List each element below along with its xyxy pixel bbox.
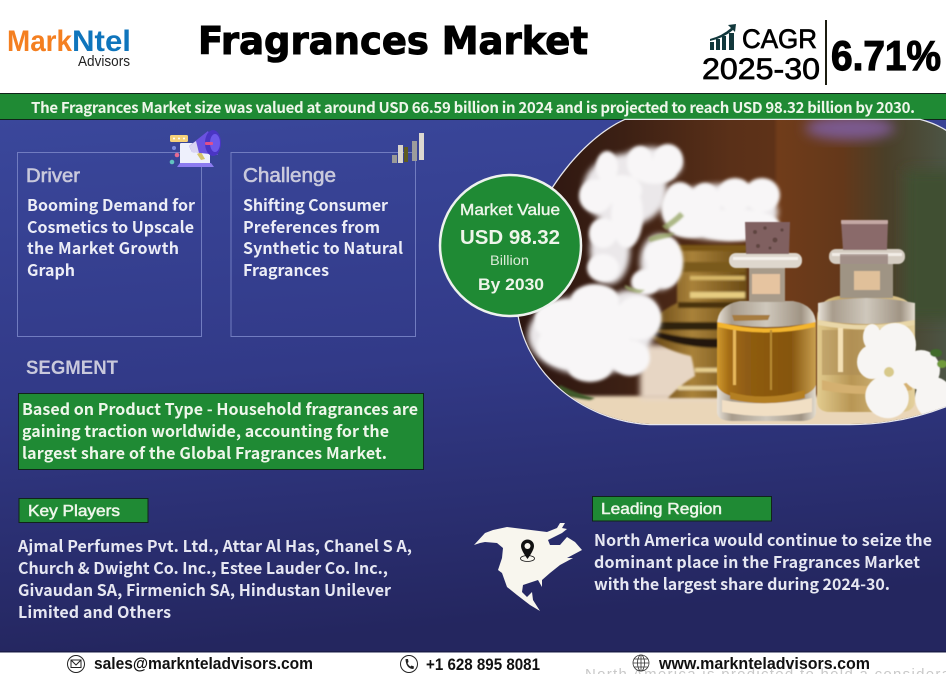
footer bar <box>0 651 946 674</box>
segment callout: largest share of the Global Fragrances Market. <box>22 440 387 464</box>
brass vase <box>647 245 747 398</box>
key players text: Givaudan SA, Firmenich SA, Hindustan Unilever <box>18 577 391 601</box>
leading region text: North America would continue to seize the <box>594 527 932 551</box>
panel: driver: Driver <box>26 166 81 187</box>
panel: challenge <box>231 152 416 336</box>
phone contact: +1 628 895 8081 <box>426 655 540 674</box>
segment callout <box>18 394 424 470</box>
main blue panel <box>0 119 946 652</box>
driver text: Graph <box>27 257 75 281</box>
icon: rising bars <box>392 133 424 163</box>
rear perfume bottle <box>817 220 915 412</box>
panel: challenge: Challenge <box>243 165 336 187</box>
photo: perfume bottles and white flowers <box>515 116 946 430</box>
market value badge <box>440 175 581 316</box>
key players text: Ajmal Perfumes Pvt. Ltd., Attar Al Has, Chanel S A, <box>17 533 412 557</box>
front perfume bottle <box>717 222 816 421</box>
segment callout: Based on Product Type - Household fragrances are <box>22 396 418 420</box>
challenge text <box>243 192 403 281</box>
map pin <box>520 540 534 562</box>
header logo: MarkNtel Advisors <box>7 25 131 70</box>
email contact: sales@marknteladvisors.com <box>94 654 313 673</box>
CAGR block: 2025-30 <box>702 53 820 86</box>
title: Fragrances Market <box>198 19 588 63</box>
leading region text <box>594 527 932 595</box>
CAGR block: CAGR <box>742 24 817 54</box>
challenge text: Synthetic to Natural <box>243 235 403 259</box>
key players label <box>19 498 148 522</box>
segment heading: SEGMENT <box>26 358 118 379</box>
challenge text: Preferences from <box>243 214 380 238</box>
driver text: Cosmetics to Upscale <box>27 214 194 238</box>
CAGR block <box>702 20 941 86</box>
icon: North America map with pin <box>474 523 582 611</box>
challenge text: Fragrances <box>243 257 329 281</box>
driver text: Booming Demand for <box>27 192 195 216</box>
market value badge: Billion <box>490 253 529 268</box>
driver text <box>27 192 195 281</box>
key players text: Limited and Others <box>18 599 171 623</box>
icon: growth chart <box>710 24 736 50</box>
website contact: www.marknteladvisors.com <box>658 654 870 673</box>
flower base mass <box>528 147 778 375</box>
photo backdrop <box>515 116 946 430</box>
challenge text: Shifting Consumer <box>243 192 388 216</box>
leaves <box>625 212 684 293</box>
header logo: MarkNtel Advisors: Advisors <box>78 53 130 70</box>
white flower cluster <box>535 144 780 382</box>
panel: driver <box>18 152 202 336</box>
leading region label <box>592 496 772 521</box>
foreground orchid <box>857 323 946 426</box>
segment callout: gaining traction worldwide, accounting for the <box>22 418 389 442</box>
icon: megaphone and laptop <box>170 130 221 167</box>
key players text <box>17 533 412 623</box>
leading region label: Leading Region <box>601 501 722 518</box>
market value badge: USD 98.32 <box>460 227 560 249</box>
summary banner: The Fragrances Market size was valued at around USD 66.59 billion in 2024 and is projected to reach USD 98.32 billion by 2030. <box>31 97 915 118</box>
market value badge: By 2030 <box>478 275 544 294</box>
driver text: the Market Growth <box>27 235 179 259</box>
header logo: MarkNtel Advisors: Mark <box>7 25 72 58</box>
key players text: Church & Dwight Co. Inc., Estee Lauder Co. Inc., <box>18 555 388 579</box>
leading region text: dominant place in the Fragrances Market <box>594 549 920 573</box>
market value badge: Market Value <box>460 202 560 219</box>
key players label: Key Players <box>28 503 120 520</box>
header logo: MarkNtel Advisors: Ntel <box>72 25 131 58</box>
leading region text: with the largest share during 2024-30. <box>594 571 890 595</box>
